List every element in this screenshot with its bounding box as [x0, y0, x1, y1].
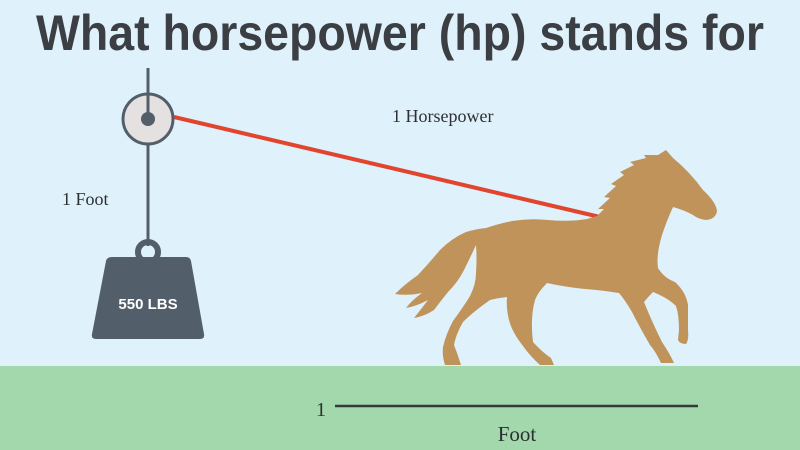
measure line: 1 foot: [316, 399, 698, 446]
weight: [92, 257, 204, 339]
horse silhouette: [395, 150, 717, 365]
pulley with rope and weight: [92, 68, 204, 339]
measure line: 1 foot: 1: [316, 399, 326, 421]
label: 1 Foot: 1 Foot: [62, 189, 109, 209]
rope: 1 horsepower pull line: [174, 117, 600, 217]
measure line: 1 foot: Foot: [498, 422, 536, 446]
label: 1 Horsepower: 1 Horsepower: [392, 106, 493, 126]
weight: 550 LBS: [118, 296, 178, 313]
title: What horsepower (hp) stands for: [36, 5, 764, 61]
ground: [0, 366, 800, 450]
